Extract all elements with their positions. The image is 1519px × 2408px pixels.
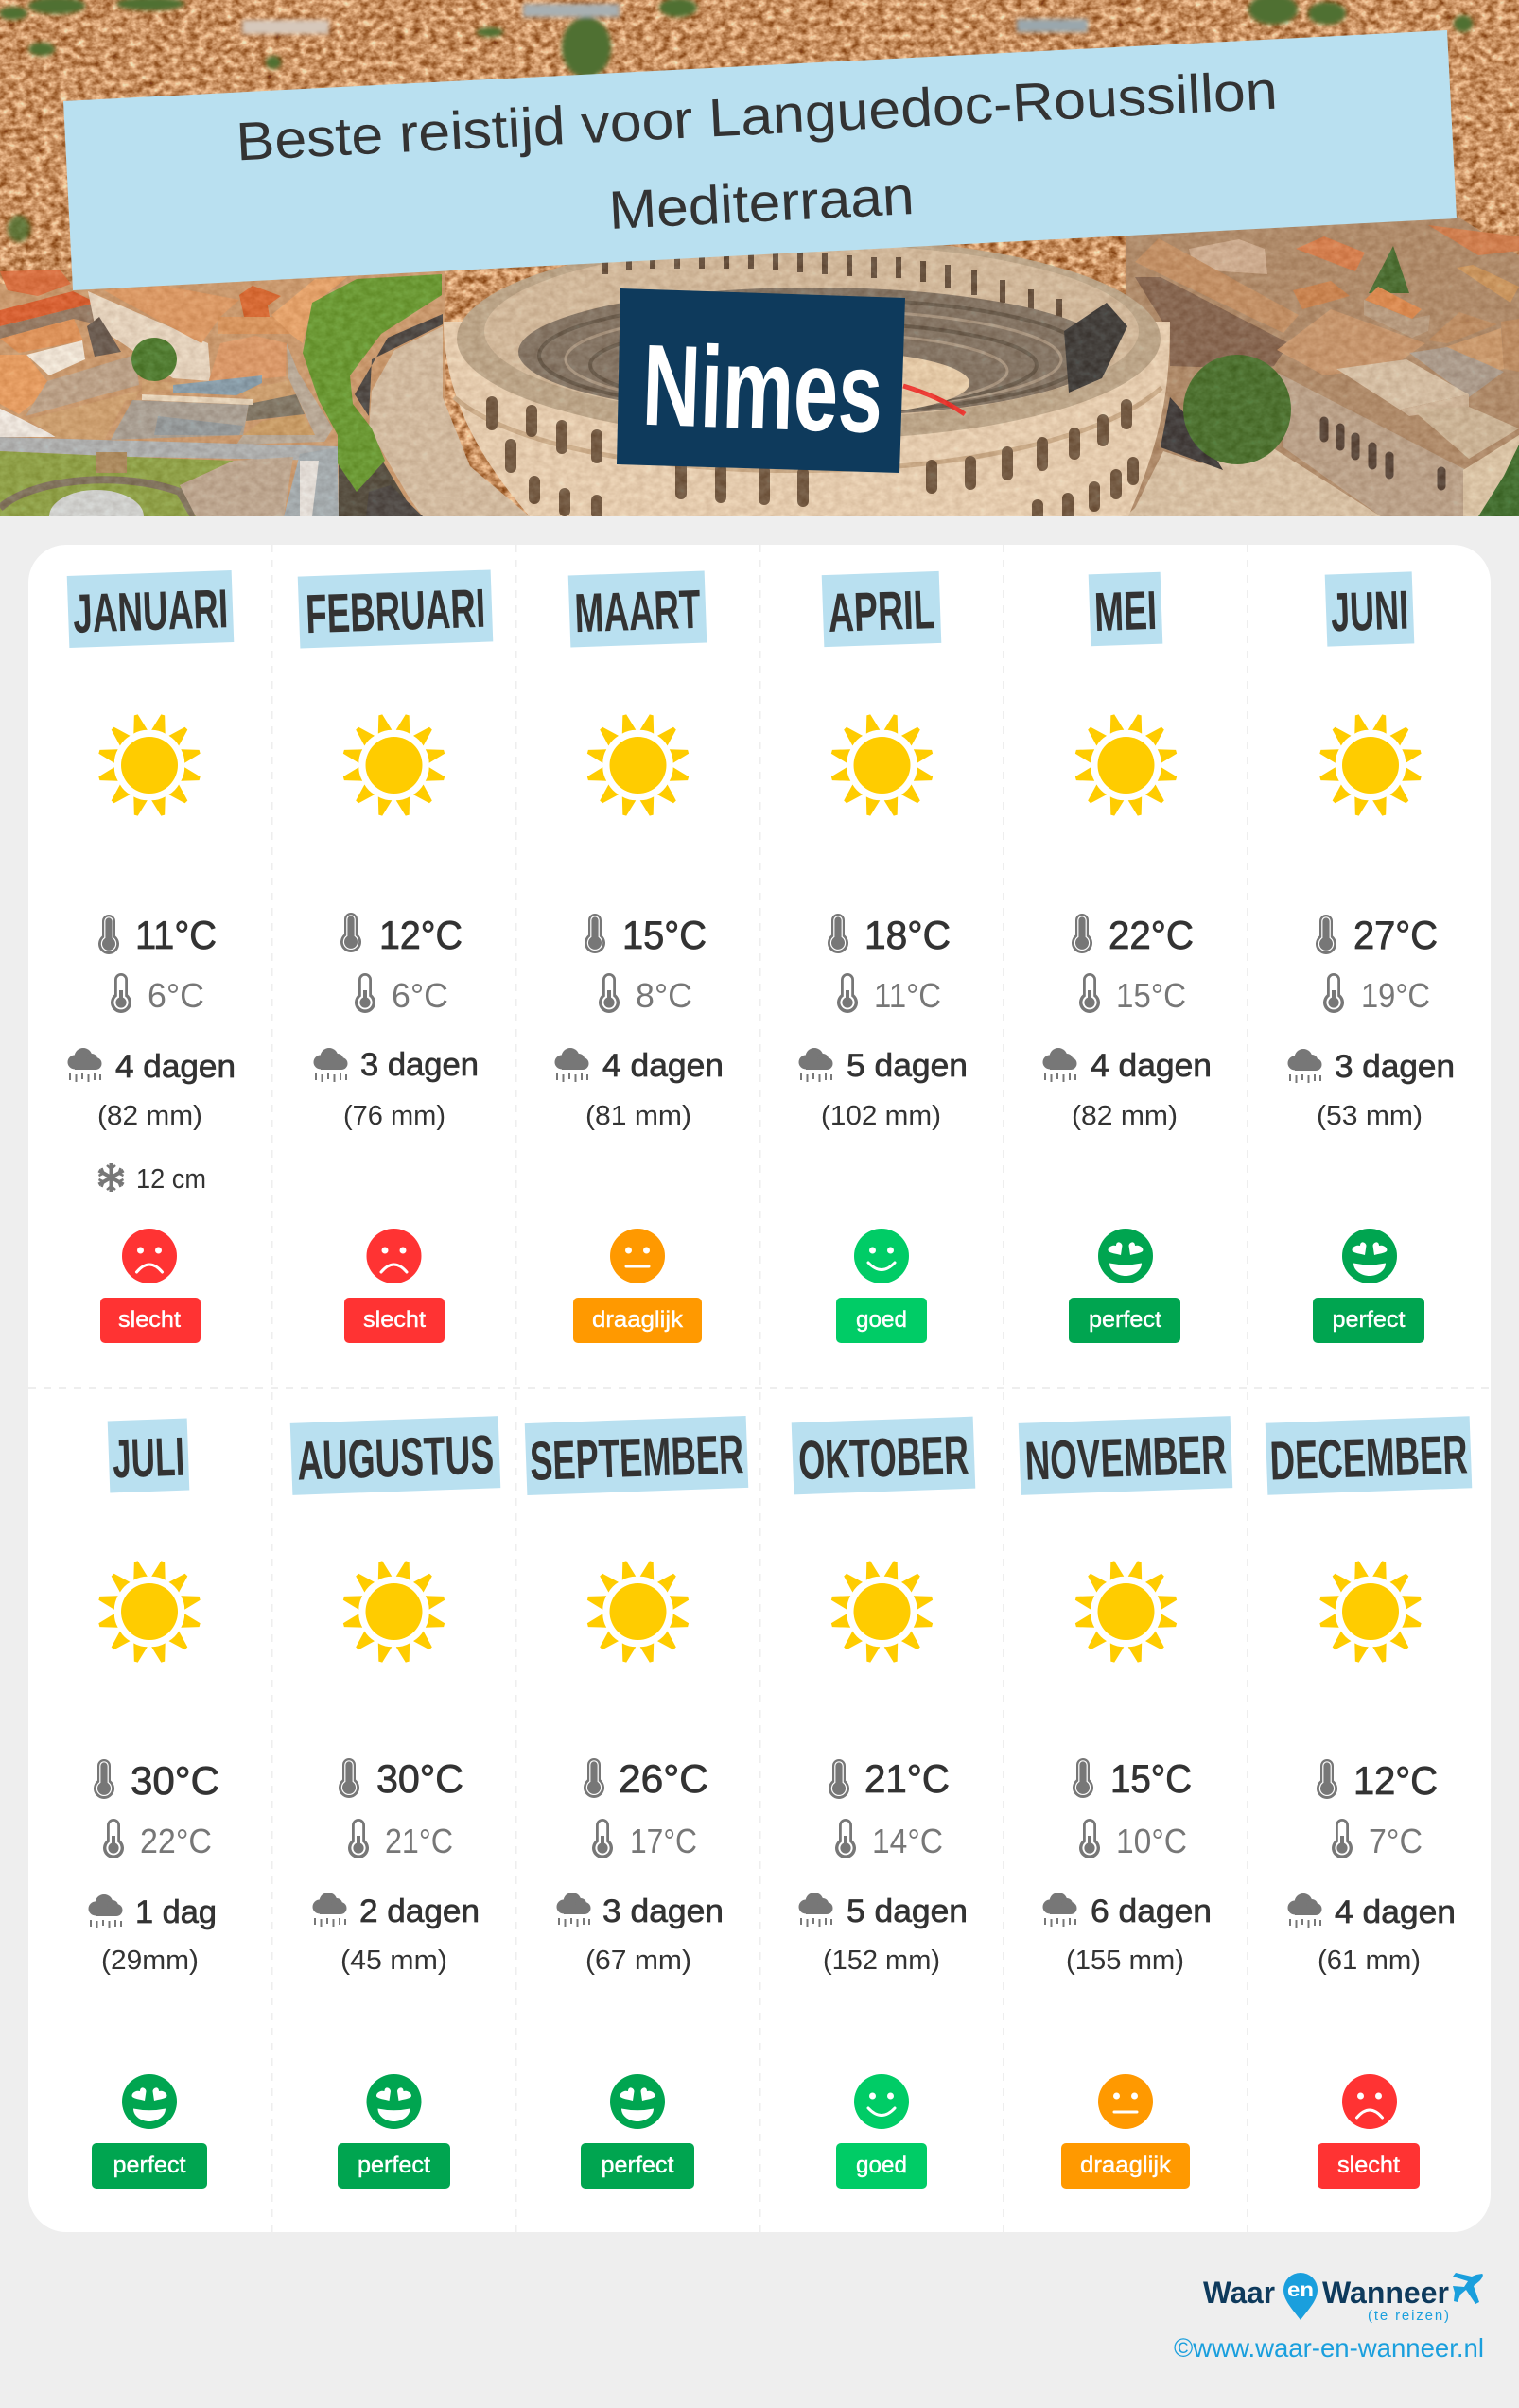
icon: heart-eyes face [122,2074,177,2129]
icon: rain cloud [68,1048,102,1082]
rating badge [1318,2143,1420,2189]
heading: juni [1325,571,1414,647]
rain days: 1 dag [135,1894,217,1930]
website credit: ©www.waar-en-wanneer.nl [1174,2333,1484,2363]
rainfall: (67 mm) [585,1946,691,1976]
min temperature: 11°C [874,976,941,1015]
rating badge: goed [856,1307,907,1333]
rating badge [1069,1298,1180,1343]
rating badge: draaglijk [592,1307,684,1333]
rain days: 3 dagen [360,1047,479,1083]
icon: thermometer low [111,973,131,1013]
month: juni [1288,571,1455,1343]
icon: sun [829,1560,934,1664]
icon: sun [1074,713,1179,817]
icon: rain cloud [314,1048,348,1082]
rating badge: draaglijk [1080,2153,1172,2178]
heading: mei [1089,572,1162,646]
icon: thermometer high [828,914,848,953]
max temperature: 30°C [131,1758,219,1803]
rating badge [92,2143,207,2189]
icon: rain cloud [312,1893,346,1927]
rainfall: (45 mm) [340,1946,447,1976]
month: november [1019,1416,1232,2189]
rainfall: (102 mm) [821,1101,941,1131]
heading: oktober [792,1417,975,1494]
city label: Nimes: Nimes [640,321,885,457]
rating badge [573,1298,702,1343]
icon: rain cloud [1288,1893,1322,1928]
min temperature: 7°C [1369,1822,1423,1860]
icon: heart-eyes face [367,2074,422,2129]
icon: thermometer low [103,1819,124,1858]
icon: thermometer low [837,973,858,1013]
icon: thermometer low [835,1819,856,1858]
icon: smiling face [854,1229,909,1283]
heading: maart: MAART [573,579,702,644]
rating badge: perfect [113,2153,186,2178]
month: februari [298,569,493,1343]
icon: sun [97,1560,201,1664]
icon: sad face [367,1229,422,1283]
heading: juli [108,1419,189,1492]
heading: februari: FEBRUARI [305,578,486,645]
min temperature: 10°C [1116,1822,1187,1860]
header photo: aerial view of the Nimes arena [0,0,1519,543]
max temperature: 12°C [379,913,463,957]
rating badge [836,2143,927,2189]
rainfall: (155 mm) [1066,1946,1184,1976]
logo: Waar en Wanneer [1203,2273,1483,2324]
rain days: 6 dagen [1091,1893,1212,1929]
min temperature: 22°C [140,1822,212,1860]
icon: sun [1074,1560,1179,1664]
heading: juni: JUNI [1330,580,1409,643]
icon: thermometer low [1079,973,1100,1013]
heading: oktober: OKTOBER [797,1424,969,1492]
heading: januari [67,570,234,648]
title line 2: Mediterraan [607,166,916,241]
icon: thermometer high [340,913,361,952]
rating badge [836,1298,927,1343]
icon: sun [341,1560,446,1664]
icon: thermometer high [94,1759,114,1799]
icon: sun [97,713,201,817]
icon: heart-eyes face [1342,1229,1397,1283]
icon: sad face [1342,2074,1397,2129]
rating badge: slecht [1337,2153,1400,2178]
rating badge: goed [856,2153,907,2178]
icon: thermometer high [1073,1758,1093,1798]
right district [1126,213,1519,516]
month: april [798,571,968,1343]
heading: augustus [290,1416,500,1495]
rain days: 2 dagen [359,1893,480,1929]
max temperature: 27°C [1353,913,1438,957]
month: december [1266,1416,1472,2189]
icon: thermometer low [1079,1819,1100,1858]
rainfall: (76 mm) [343,1101,445,1131]
icon: rain cloud [556,1893,590,1927]
rain days: 3 dagen [1335,1049,1455,1085]
min temperature: 6°C [392,976,448,1015]
min temperature: 21°C [385,1822,453,1860]
min temperature: 15°C [1116,976,1186,1015]
city label: Nimes [617,288,905,473]
logo: Waar en Wanneer: Waar [1203,2276,1275,2310]
min temperature: 14°C [872,1822,943,1860]
rating badge: perfect [1089,1307,1161,1333]
icon: map pin: en [1287,2279,1314,2301]
icon: rain cloud [798,1893,832,1927]
heading: juli: JULI [112,1426,185,1490]
rainfall: (82 mm) [1072,1101,1178,1131]
min temperature: 17°C [630,1822,697,1860]
icon: rain cloud [798,1048,832,1082]
icon: thermometer low [599,973,620,1013]
icon: neutral face [1098,2074,1153,2129]
icon: smiling face [854,2074,909,2129]
icon: airplane [1453,2273,1483,2304]
rating badge [338,2143,450,2189]
rain days: 5 dagen [847,1893,968,1929]
snowfall: 12 cm [136,1164,206,1195]
rain days: 4 dagen [1091,1048,1212,1084]
icon: rain cloud [89,1894,123,1928]
rainfall: (61 mm) [1318,1946,1421,1976]
rating badge [1313,1298,1424,1343]
max temperature: 11°C [135,913,217,957]
max temperature: 26°C [619,1756,708,1801]
max temperature: 22°C [1109,913,1194,957]
icon: thermometer high [1316,915,1336,954]
icon: thermometer high [585,914,605,953]
rating badge [100,1298,201,1343]
icon: snowflake [98,1163,123,1192]
rainfall: (82 mm) [97,1101,202,1131]
max temperature: 15°C [1110,1756,1192,1801]
icon: neutral face [610,1229,665,1283]
rating badge [581,2143,694,2189]
heading: april: APRIL [827,579,936,644]
rating badge: perfect [602,2153,674,2178]
icon: thermometer low [348,1819,369,1858]
rating badge: slecht [363,1307,426,1333]
icon: thermometer high [98,915,119,954]
icon: heart-eyes face [610,2074,665,2129]
rating badge: perfect [358,2153,430,2178]
icon: sun [1318,713,1423,817]
rain days: 4 dagen [602,1048,724,1084]
icon: thermometer high [1317,1759,1337,1799]
logo: Waar en Wanneer: Wanneer [1322,2276,1449,2310]
heading: april [822,571,941,647]
rain days: 4 dagen [115,1049,236,1085]
max temperature: 30°C [376,1756,463,1801]
icon: rain cloud [554,1048,588,1082]
icon: thermometer low [592,1819,613,1858]
icon: sun [829,713,934,817]
panel: monthly climate calendar [28,545,1491,2232]
heading: mei: MEI [1093,580,1158,643]
icon: thermometer low [1323,973,1344,1013]
icon: heart-eyes face [1098,1229,1153,1283]
rating badge: perfect [1332,1307,1406,1333]
icon: sun [585,1560,690,1664]
month: oktober [792,1417,975,2189]
min temperature: 19°C [1361,976,1430,1015]
month: augustus [290,1416,500,2189]
icon: rain cloud [1042,1893,1076,1927]
rainfall: (29mm) [101,1946,199,1976]
heading: september [525,1416,748,1495]
month: juli [89,1419,219,2189]
icon: thermometer low [355,973,375,1013]
left district [0,270,445,516]
heading: augustus: AUGUSTUS [296,1423,495,1492]
max temperature: 18°C [864,913,951,957]
heading: maart [568,571,707,647]
rainfall: (152 mm) [823,1946,940,1976]
icon: sun [585,713,690,817]
max temperature: 21°C [864,1756,950,1801]
max temperature: 15°C [622,913,707,957]
icon: sun [341,713,446,817]
icon: sad face [122,1229,177,1283]
icon: rain cloud [1042,1048,1076,1082]
month: maart [554,571,724,1343]
title line 1: Beste reistijd voor Languedoc-Roussillon [235,61,1279,172]
icon: thermometer high [584,1758,604,1798]
icon: map pin [1283,2273,1318,2320]
heading: november [1019,1416,1232,1495]
min temperature: 8°C [636,976,692,1015]
icon: thermometer high [1072,914,1092,953]
heading: september: SEPTEMBER [529,1423,744,1492]
max temperature: 12°C [1353,1758,1438,1803]
rain days: 3 dagen [602,1893,724,1929]
icon: thermometer low [1332,1819,1353,1858]
rain days: 4 dagen [1335,1894,1456,1930]
title banner [63,30,1457,290]
icon: rain cloud [1288,1049,1322,1083]
month: mei [1042,572,1212,1343]
rating badge [344,1298,445,1343]
min temperature: 6°C [148,976,204,1015]
icon: sun [1318,1560,1423,1664]
arena [444,322,1170,516]
heading: januari: JANUARI [72,578,229,645]
rating badge: slecht [118,1307,181,1333]
heading: november: NOVEMBER [1024,1423,1228,1492]
month: januari [67,570,236,1343]
logo: Waar en Wanneer: (te reizen) [1368,2308,1449,2324]
rain days: 5 dagen [847,1048,968,1084]
icon: thermometer high [829,1759,849,1799]
month: september [525,1416,748,2189]
rainfall: (53 mm) [1317,1101,1423,1131]
heading: februari [298,569,493,649]
rainfall: (81 mm) [585,1101,691,1131]
icon: thermometer high [339,1758,359,1798]
rating badge [1061,2143,1190,2189]
